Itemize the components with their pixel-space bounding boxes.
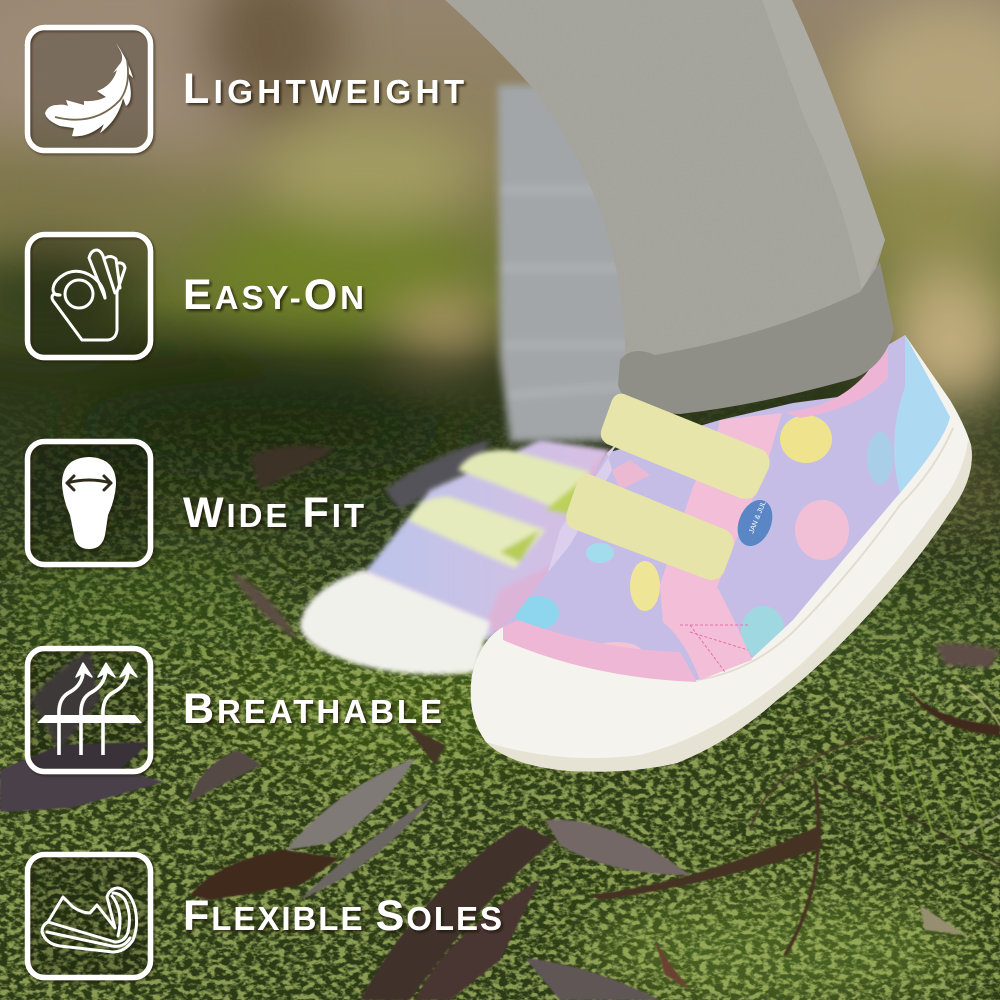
icon: breathable arrows [28,648,150,772]
front shoe body [471,335,972,772]
back leg, out of focus [498,85,650,442]
brand badge [731,495,779,551]
icon: wide fit sole [28,442,150,564]
brand badge: JAN & JUL [748,500,768,535]
lower velcro strap [566,474,734,580]
back shoe, out of focus [300,440,610,674]
macaron print [515,415,893,662]
velcro straps [566,394,770,580]
icon: easy-on OK hand [28,234,150,358]
upper velcro strap [601,394,770,499]
heading: Easy-On: EASY-ON [183,271,364,319]
heading: Flexible Soles: FLEXIBLE SOLES [183,892,502,940]
front leg: grey leggings and cuff [445,0,894,414]
upper canvas [503,335,950,680]
sole [471,335,972,772]
icon: lightweight feather [28,28,150,150]
heading: Lightweight: LIGHTWEIGHT [183,65,464,113]
icon: flexible sole shoe [28,854,150,978]
heading: Breathable: BREATHABLE [183,685,442,733]
pink toe band [503,620,697,682]
heading: Wide Fit: WIDE FIT [183,489,364,537]
pink strap panel [660,413,782,680]
strap opening lining [548,440,620,572]
fallen leaves on the moss [0,440,1000,1000]
blue heel panel [894,335,950,493]
pink collar [785,345,888,418]
